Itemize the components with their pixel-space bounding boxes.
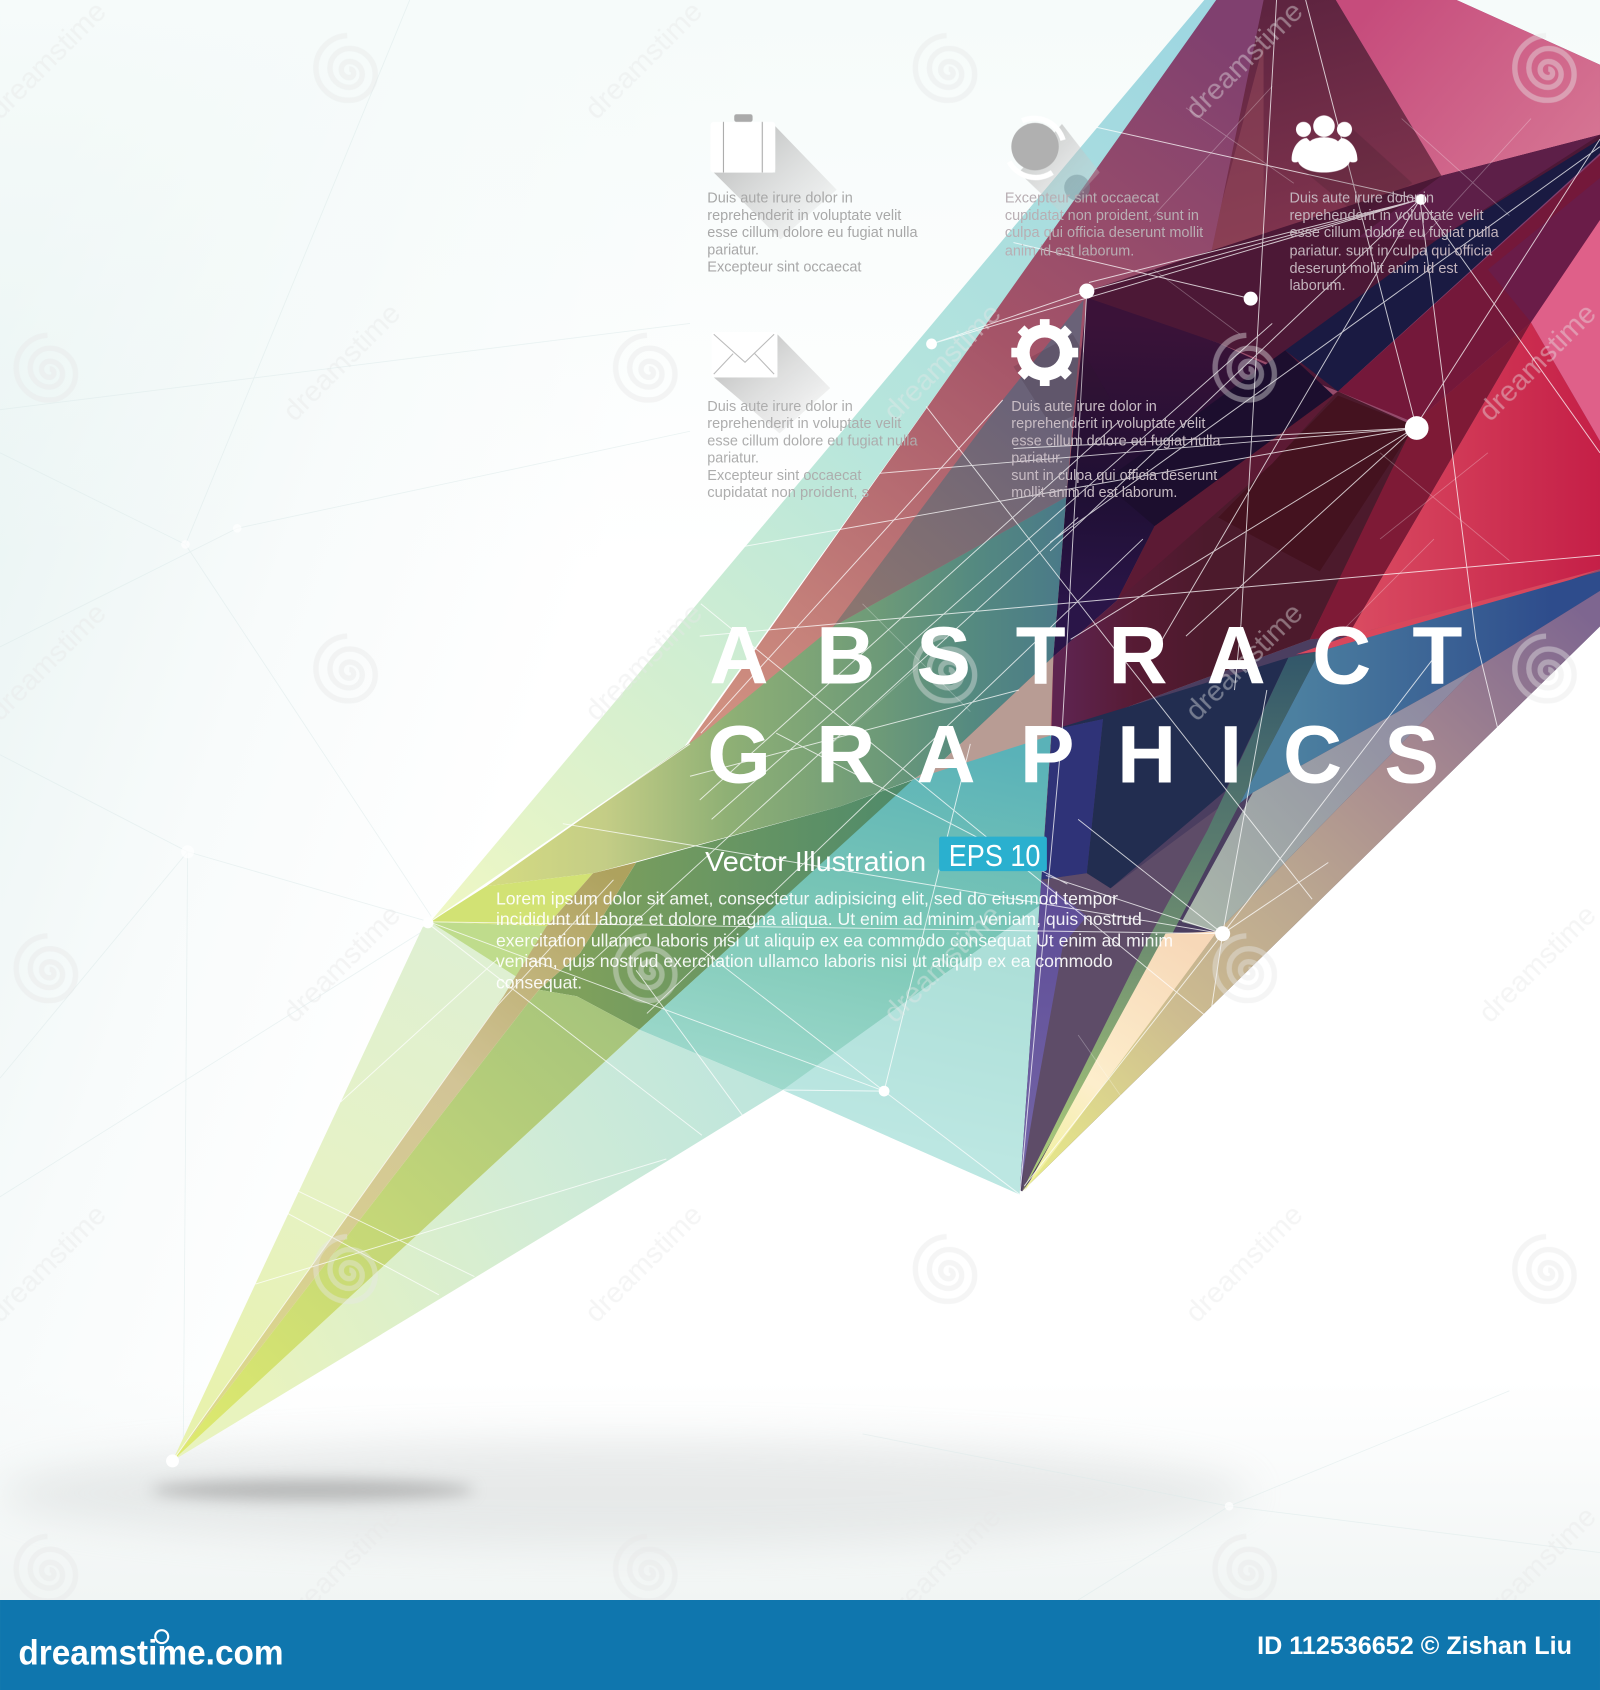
slate facet [1182,670,1474,932]
white mesh lines [173,0,1600,1461]
text block: column 2 [1005,191,1203,260]
pale fan left [173,922,547,1461]
text block: column 5: mollit anim id est laborum. [1011,485,1177,501]
footer credit: ID 112536652 © Zishan Liu [1257,1633,1572,1660]
blue facet [1240,571,1600,803]
title: GRAPHICS [707,710,1439,801]
body paragraph: consequat. [496,973,582,993]
pale cyan strip [430,0,1218,922]
text block: column 4: cupidatat non proident, s [707,485,869,501]
text block: column 5: pariatur. [1011,451,1063,467]
watermark text: dreamstime [277,297,407,427]
pink top [1336,0,1600,176]
text block: column 1: esse cillum dolore eu fugiat nulla [707,225,918,241]
green band [486,497,1066,886]
text block: column 5 [1011,399,1220,501]
text block: column 3: deserunt mollit anim id est [1289,261,1458,277]
watermark text: dreamstime [277,899,407,1029]
icon: shopping bag [711,114,837,239]
watermark text: dreamstime [277,1501,407,1631]
dark green facet [539,780,914,1030]
red corner [1296,569,1600,654]
subtitle [705,837,1047,877]
subtitle: EPS 10 [949,840,1040,873]
red block [1348,322,1600,636]
lime wedge to tip [173,990,639,1461]
text block: column 4: Excepteur sint occaecat [707,468,861,484]
text block: column 3: Duis aute irure dolor in [1289,191,1434,207]
body paragraph [496,889,1173,993]
watermark text: dreamstime [1472,899,1600,1029]
faint cross lines [819,86,1531,1164]
watermark text: dreamstime [877,899,1007,1029]
text block: column 3: laborum. [1289,278,1346,294]
deep dark facet [1053,298,1334,657]
text block: column 2: culpa qui officia deserunt mollit [1005,225,1203,241]
watermark text: dreamstime [1472,297,1600,427]
footer logo: dreamstime.com [18,1633,284,1673]
text block: column 2: Excepteur sint occaecat [1005,191,1159,207]
icon: people group [1292,115,1412,216]
text block: column 3: esse cillum dolore eu fugiat nulla [1289,225,1499,241]
maroon wedge [1196,0,1441,327]
dark plum band [1087,135,1600,391]
text block: column 5: reprehenderit in voluptate velit [1011,416,1205,432]
main mauve body [685,0,1600,749]
green apex wedge [430,922,547,990]
body paragraph: veniam, quis nostrud exercitation ullamco laboris nisi ut aliquip ex ea commodo [496,951,1113,971]
pink right facet [1531,220,1600,441]
ground shadow [0,1439,1251,1547]
body paragraph: exercitation ullamco laboris nisi ut aliquip ex ea commodo consequat Ut enim ad minim [496,931,1173,951]
peach facet [1024,932,1217,1191]
icon: envelope [712,332,830,433]
text block: column 3: reprehenderit in voluptate velit [1289,208,1484,224]
icon: gear [1011,319,1111,426]
text block: column 1: pariatur. [707,242,759,258]
navy streak [1285,139,1600,391]
tan lower band [1022,591,1600,1191]
mesh nodes [166,194,1429,1510]
text block: column 1: Duis aute irure dolor in [707,191,853,207]
body paragraph: Lorem ipsum dolor sit amet, consectetur adipisicing elit, sed do eiusmod tempor [496,889,1118,909]
text block: column 3 [1289,191,1499,294]
watermark text: dreamstime [579,597,709,727]
title: ABSTRACT [709,611,1462,702]
watermark text: dreamstime [877,1501,1007,1631]
footer bar [0,1600,1600,1690]
teal facet [639,735,1051,1195]
text block: column 4: esse cillum dolore eu fugiat nulla [707,433,918,449]
text block: column 4: pariatur. [707,451,759,467]
subtitle: Vector Illustration [705,846,926,877]
dark red strip [1310,322,1531,639]
text block: column 4 [707,399,918,501]
dark mauve facet [1022,803,1225,1191]
watermark text: dreamstime [579,1199,709,1329]
text block: column 2: anim id est laborum. [1005,244,1134,260]
icon: refresh arrows [1009,118,1100,213]
royal blue facet [1042,719,1103,880]
mint fan right [173,1030,783,1461]
body paragraph: incididunt ut labore et dolore magna aliqua. Ut enim ad minim veniam, quis nostrud [496,909,1142,929]
watermark text: dreamstime [1179,1199,1309,1329]
text block: column 5: sunt in culpa qui officia deserunt [1011,468,1217,484]
lower right base [1020,571,1600,1191]
crimson streak [1338,155,1600,423]
text block: column 1 [707,191,918,276]
text block: column 5: esse cillum dolore eu fugiat nulla [1011,433,1220,449]
text block: column 5: Duis aute irure dolor in [1011,399,1157,415]
light lower teal [783,906,1039,1195]
maroon lower facet [1051,391,1415,735]
text block: column 1: reprehenderit in voluptate velit [707,208,901,224]
green thin strip [1022,651,1320,1191]
polygon crystal [173,0,1600,1461]
watermark text: dreamstime [1179,597,1309,727]
tan wedge [913,657,1053,780]
tan stripe to tip [173,863,636,1461]
navy facet [1052,658,1288,888]
text block: column 3: pariatur. sunt in culpa qui officia [1289,244,1492,260]
yellow apex wedge [430,873,593,926]
text block: column 4: reprehenderit in voluptate velit [707,416,901,432]
title [707,611,1462,801]
purple left facet [1020,880,1087,1190]
text block: column 2: cupidatat non proident, sunt in [1005,208,1199,224]
text block: column 1: Excepteur sint occaecat [707,260,861,276]
text block: column 4: Duis aute irure dolor in [707,399,853,415]
gray mauve facet [833,300,1084,626]
watermark text: dreamstime [1472,1501,1600,1631]
watermark text: dreamstime [877,297,1007,427]
